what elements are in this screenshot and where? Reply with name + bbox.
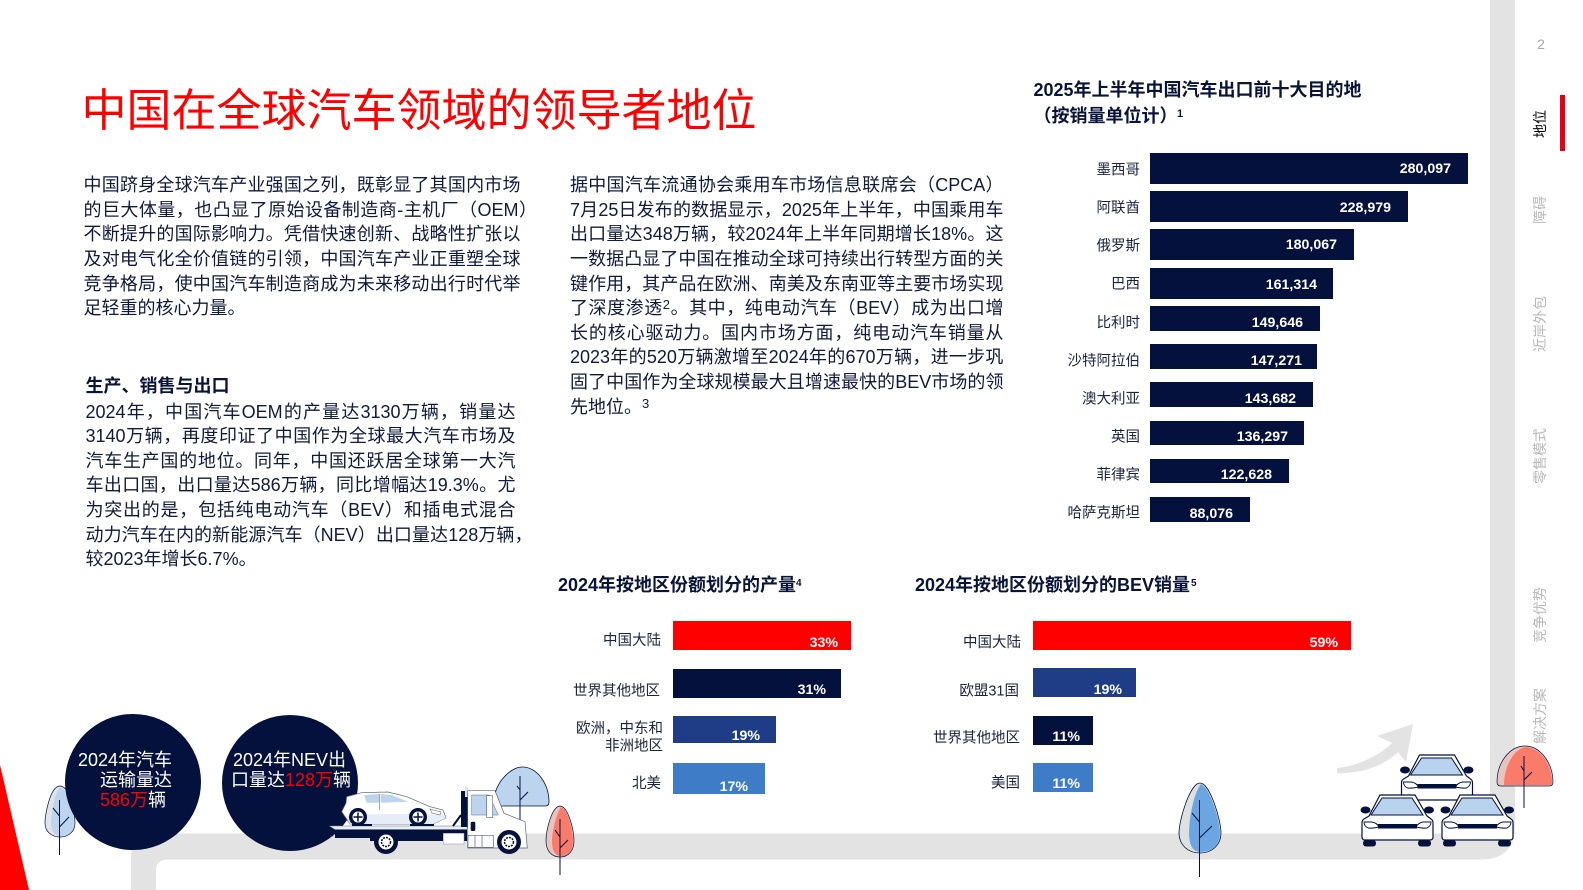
bars <box>1150 153 1468 522</box>
text block: production, sales and exports <box>86 376 532 569</box>
region labels: 世界其他地区 <box>933 730 1020 746</box>
text block: introduction: 的巨大体量，也凸显了原始设备制造商-主机厂（OEM） <box>84 200 537 220</box>
country labels: 墨西哥 <box>1096 163 1140 179</box>
bar values: 136,297 <box>1237 429 1288 445</box>
text block: CPCA data: 据中国汽车流通协会乘用车市场信息联席会（CPCA） <box>570 175 1004 195</box>
bar values: 147,271 <box>1251 353 1302 369</box>
icon: group of three cars <box>1360 755 1514 846</box>
share values <box>720 635 838 795</box>
chart heading <box>1034 79 1362 126</box>
stat circle: vehicle shipments: 586万辆 <box>100 790 166 810</box>
nav item: 地位: 地位 <box>1532 110 1548 138</box>
country labels: 阿联酋 <box>1096 199 1140 217</box>
icon: red dome tree <box>1497 746 1553 808</box>
country labels: 比利时 <box>1096 314 1140 331</box>
chart: production share by region <box>558 574 851 795</box>
icon: large blue tree <box>1179 783 1221 877</box>
bar values: 149,646 <box>1252 315 1303 331</box>
country labels: 俄罗斯 <box>1096 238 1140 255</box>
chart: BEV sales share by region <box>915 574 1351 792</box>
region labels: 中国大陆 <box>603 632 661 649</box>
text block: introduction <box>84 175 537 318</box>
truck bed <box>329 826 467 844</box>
country labels: 英国 <box>1111 428 1140 446</box>
stat circle: NEV exports <box>222 715 358 851</box>
stat circle: vehicle shipments: 运输量达 <box>100 770 172 790</box>
text block: CPCA data: 固了中国作为全球规模最大且增速最快的BEV市场的领 <box>570 372 1004 392</box>
region labels: 美国 <box>991 774 1020 792</box>
text block: CPCA data: 7月25日发布的数据显示，2025年上半年，中国乘用车 <box>570 200 1004 220</box>
text block: introduction: 竞争格局，使中国汽车制造商成为未来移动出行时代举 <box>84 274 520 294</box>
text block: production, sales and exports: 汽车生产国的地位。同年，中国还跃居全球第一大汽 <box>86 451 516 471</box>
text block: CPCA data: 一数据凸显了中国在推动全球可持续出行转型方面的关 <box>570 249 1004 269</box>
chart heading: 2024年按地区份额划分的产量 <box>558 574 796 595</box>
share values: 11% <box>1052 729 1080 745</box>
car: front right <box>1440 795 1514 846</box>
nav item: 解决方案: 解决方案 <box>1532 688 1548 744</box>
nav item: 竞争优势: 竞争优势 <box>1532 587 1548 643</box>
text block: CPCA data: 键作用，其产品在欧洲、南美及东南亚等主要市场实现 <box>570 274 1004 294</box>
chart heading: 1 <box>1177 108 1183 120</box>
country labels: 澳大利亚 <box>1082 390 1140 408</box>
text block: production, sales and exports: 2024年，中国汽车OEM的产量达3130万辆，销量达 <box>86 402 516 422</box>
chart: top ten export destinations <box>1034 79 1468 522</box>
share values <box>1052 635 1338 792</box>
text block: introduction: 中国跻身全球汽车产业强国之列，既彰显了其国内市场 <box>84 175 520 195</box>
nav item: 近岸外包: 近岸外包 <box>1532 296 1548 352</box>
stat circle: vehicle shipments: 2024年汽车 <box>78 750 172 770</box>
region labels: 欧盟31国 <box>959 682 1019 700</box>
country labels: 哈萨克斯坦 <box>1068 505 1140 522</box>
region labels: 世界其他地区 <box>573 682 660 700</box>
car: back <box>1400 755 1474 806</box>
bar values: 228,979 <box>1340 200 1391 216</box>
share values: 59% <box>1310 635 1338 651</box>
truck wheels <box>374 830 521 854</box>
chart heading: 2025年上半年中国汽车出口前十大目的地 <box>1034 79 1362 100</box>
text block: CPCA data: 长的核心驱动力。国内市场方面，纯电动汽车销量从 <box>570 323 1004 343</box>
text block: introduction: 不断提升的国际影响力。凭借快速创新、战略性扩张以 <box>84 224 520 244</box>
bar values: 143,682 <box>1245 391 1296 407</box>
bar values: 88,076 <box>1190 506 1233 522</box>
text block: production, sales and exports: 较2023年增长6.7%。 <box>86 549 257 569</box>
nav item: 零售模式: 零售模式 <box>1532 428 1548 484</box>
car on truck <box>342 792 446 826</box>
share values: 19% <box>1094 682 1122 698</box>
bars <box>1033 621 1351 792</box>
share values: 19% <box>732 728 760 744</box>
chart heading: （按销量单位计） <box>1034 105 1178 126</box>
text block: CPCA data: 出口量达348万辆，较2024年上半年同期增长18%。这 <box>570 224 1004 244</box>
country labels: 菲律宾 <box>1096 467 1140 484</box>
icon: tow truck carrying a car <box>329 787 527 854</box>
text block: introduction: 及对电气化全价值链的引领，中国汽车产业正重塑全球 <box>84 249 520 269</box>
share values: 17% <box>720 779 748 795</box>
bar values: 280,097 <box>1400 161 1451 177</box>
text block: production, sales and exports: 动力汽车在内的新能源汽车（NEV）出口量达128万辆， <box>86 525 532 545</box>
nav item: 障碍: 障碍 <box>1532 196 1548 224</box>
car: front left <box>1360 795 1434 846</box>
icon: red tree <box>546 806 574 875</box>
active nav marker <box>1560 95 1565 151</box>
sidebar navigation <box>1532 95 1565 744</box>
truck cab <box>453 787 527 848</box>
bar values: 122,628 <box>1221 467 1272 483</box>
bar values: 161,314 <box>1266 277 1317 293</box>
chart heading: 2024年按地区份额划分的BEV销量 <box>915 574 1190 595</box>
bar values <box>1190 161 1451 522</box>
text block: CPCA data: 2023年的520万辆激增至2024年的670万辆，进一步巩 <box>570 347 1004 367</box>
region labels: 北美 <box>632 775 661 792</box>
text block: production, sales and exports: 为突出的是，包括纯电动汽车（BEV）和插电式混合 <box>86 500 516 520</box>
country labels <box>1068 163 1140 522</box>
region labels <box>573 632 663 792</box>
chart heading: 4 <box>796 578 802 589</box>
stat circle: vehicle shipments <box>65 714 201 850</box>
stat circle: NEV exports: 口量达128万辆 <box>231 770 351 790</box>
bars <box>673 621 851 794</box>
text block: production, sales and exports: 生产、销售与出口 <box>86 376 230 396</box>
region labels: 非洲地区 <box>605 738 663 754</box>
text block: production, sales and exports: 3140万辆，再度印证了中国作为全球最大汽车市场及 <box>86 426 516 446</box>
text block: CPCA data: 了深度渗透2。其中，纯电动汽车（BEV）成为出口增 <box>570 297 1004 318</box>
page number: 2 <box>1537 36 1545 52</box>
share values: 31% <box>798 682 826 698</box>
text block: CPCA data <box>570 175 1004 417</box>
chart heading: 5 <box>1191 578 1197 589</box>
text block: CPCA data: 先地位。3 <box>570 396 649 417</box>
icon: round blue tree <box>494 767 549 827</box>
region labels: 中国大陆 <box>963 634 1021 651</box>
country labels: 巴西 <box>1111 277 1140 293</box>
region labels: 欧洲，中东和 <box>576 720 663 737</box>
title: 中国在全球汽车领域的领导者地位 <box>82 85 757 136</box>
arrow: growth <box>1337 724 1413 773</box>
region labels <box>933 634 1021 792</box>
stat circle: NEV exports: 2024年NEV出 <box>233 750 346 770</box>
country labels: 沙特阿拉伯 <box>1068 353 1140 370</box>
share values: 33% <box>810 635 838 651</box>
text block: production, sales and exports: 车出口国，出口量达586万辆，同比增幅达19.3%。尤 <box>86 475 516 495</box>
text block: introduction: 足轻重的核心力量。 <box>84 298 246 318</box>
bar values: 180,067 <box>1286 237 1337 253</box>
red corner accent <box>0 765 29 890</box>
icon: small blue tree left <box>45 786 75 855</box>
share values: 11% <box>1052 776 1080 792</box>
